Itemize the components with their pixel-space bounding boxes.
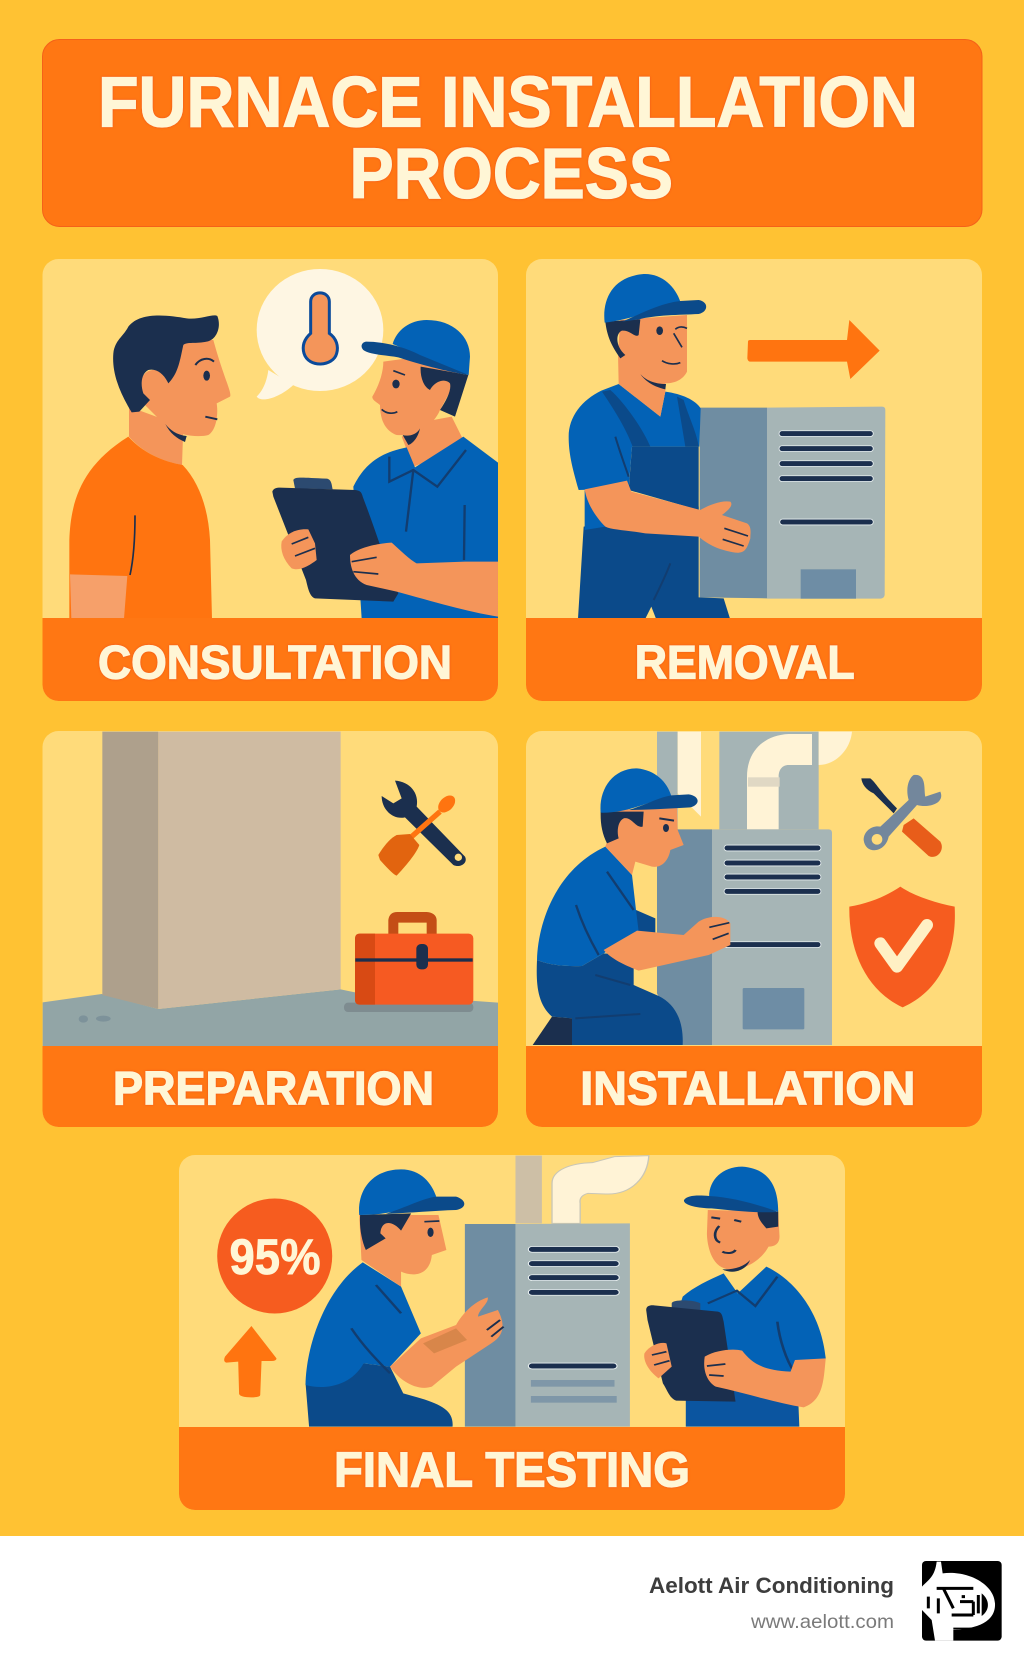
empty installation space wall block bbox=[102, 732, 341, 1009]
title banner: FURNACE INSTALLATION bbox=[98, 64, 918, 142]
arrow pointing up bbox=[224, 1326, 277, 1397]
efficiency badge 95%: 95% bbox=[230, 1229, 320, 1285]
technician with clipboard bbox=[272, 320, 498, 619]
arrow pointing right bbox=[747, 320, 880, 379]
old furnace unit bbox=[700, 407, 885, 599]
kneeling technician bbox=[533, 768, 730, 1045]
label: installation: INSTALLATION bbox=[580, 1062, 915, 1116]
icon: red toolbox bbox=[344, 912, 473, 1012]
customer in orange shirt bbox=[69, 315, 230, 619]
speech bubble with thermometer icon bbox=[257, 269, 383, 399]
panel: consultation bbox=[42, 259, 498, 701]
logo bbox=[922, 1561, 1002, 1641]
footer bbox=[0, 1536, 1024, 1666]
panel: preparation bbox=[42, 731, 498, 1127]
icon: wrench and screwdriver bbox=[378, 781, 466, 876]
label: final testing: FINAL TESTING bbox=[334, 1442, 690, 1498]
panel: removal bbox=[526, 259, 982, 701]
title banner bbox=[42, 40, 982, 226]
icon: wrench and screwdriver bbox=[861, 775, 942, 857]
new furnace with vent pipes bbox=[657, 732, 852, 1045]
furnace with vent pipes bbox=[465, 1156, 649, 1427]
floor bbox=[43, 989, 498, 1046]
label: preparation: PREPARATION bbox=[113, 1062, 434, 1116]
technician with clipboard bbox=[644, 1167, 826, 1427]
technician inspecting furnace bbox=[306, 1169, 504, 1427]
company name: Aelott Air Conditioning bbox=[649, 1573, 894, 1598]
worker carrying furnace bbox=[569, 274, 751, 619]
panel: final testing bbox=[179, 1155, 845, 1510]
icon: safety shield with check bbox=[849, 887, 955, 1007]
website: www.aelott.com bbox=[750, 1611, 894, 1633]
panel: installation bbox=[526, 731, 982, 1127]
efficiency badge 95% bbox=[217, 1198, 332, 1314]
label: consultation: CONSULTATION bbox=[98, 636, 452, 690]
label: removal: REMOVAL bbox=[635, 636, 855, 690]
title banner: PROCESS bbox=[350, 135, 673, 214]
